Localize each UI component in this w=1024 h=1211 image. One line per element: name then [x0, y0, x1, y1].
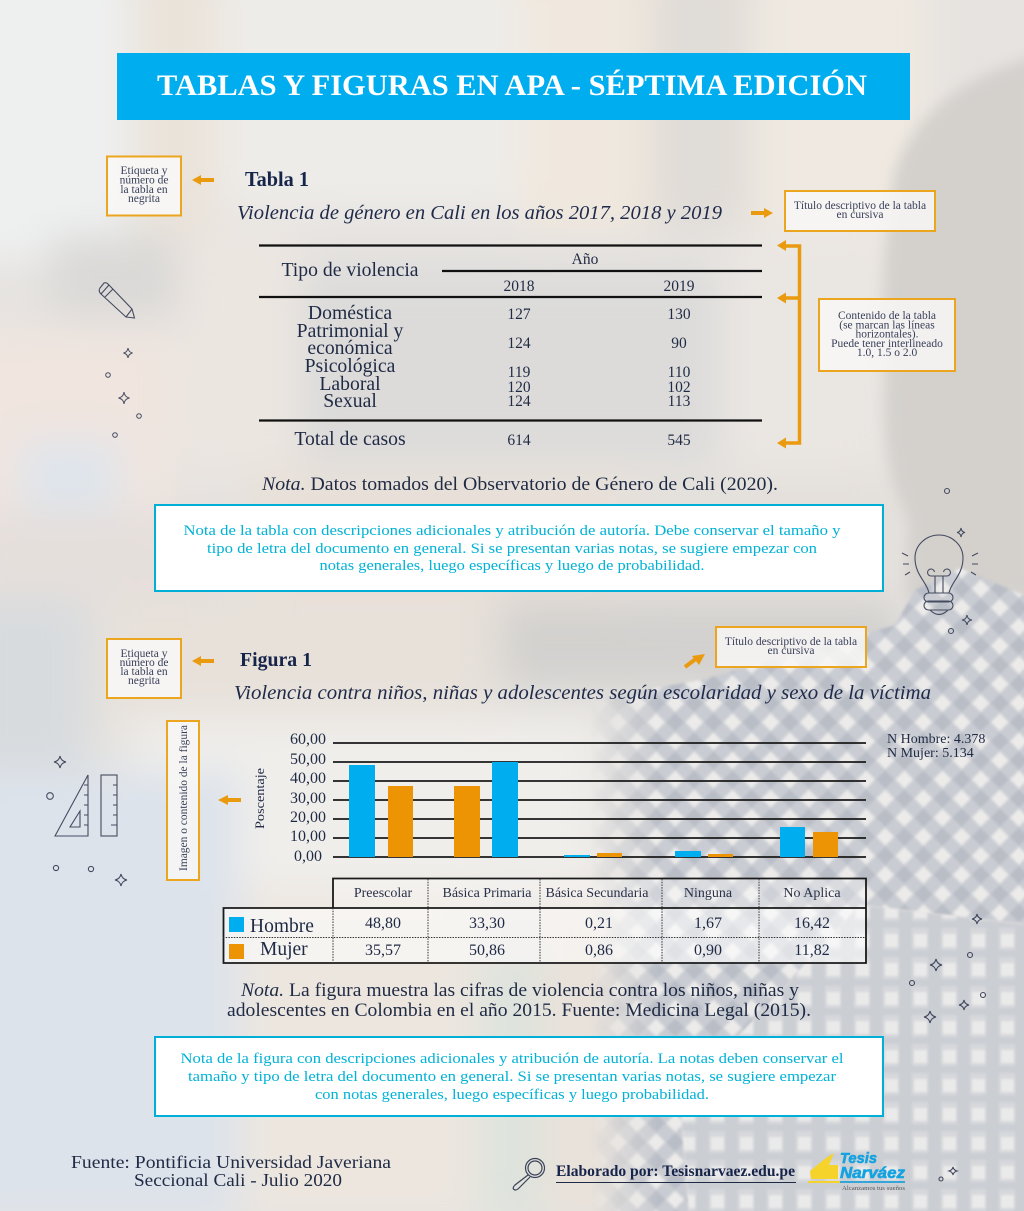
- arrow: titulo figura: [685, 658, 697, 667]
- source footer: Fuente: Pontificia Universidad Javeriana: [71, 1152, 391, 1172]
- table 1: 113: [668, 393, 691, 410]
- callout: etiqueta figura: número de: [120, 657, 168, 669]
- callout: contenido tabla: horizontales).: [856, 328, 919, 340]
- logo: Tesis Narváez: [808, 1150, 905, 1192]
- callout: titulo figura: [716, 627, 866, 667]
- icon: magnifying glass: [513, 1158, 544, 1190]
- table 1: 124: [507, 393, 531, 410]
- bar chart: 20,00: [290, 809, 326, 826]
- callout: contenido tabla: (se marcan las líneas: [839, 320, 935, 332]
- table 1: 102: [667, 379, 691, 396]
- arrow: etiqueta tabla: [192, 175, 214, 185]
- panel: nota de la tabla: notas generales, luego específicas y luego de probabilidad.: [320, 558, 704, 574]
- callout: etiqueta tabla: [107, 156, 181, 216]
- table 1: Laboral: [319, 373, 381, 395]
- figure note: [227, 981, 811, 1021]
- data table: Hombre: [250, 916, 314, 937]
- heading: Tabla 1: Tabla 1: [245, 167, 309, 191]
- table 1: Total de casos: [294, 428, 406, 450]
- table 1: Psicológica: [305, 355, 396, 377]
- bar chart: 40,00: [290, 770, 326, 787]
- bar chart: 0,00: [294, 848, 322, 865]
- data table: 35,57: [365, 942, 401, 959]
- callout: contenido tabla: Contenido de la tabla: [838, 310, 936, 322]
- callout: etiqueta tabla: negrita: [128, 193, 160, 205]
- figure note: Nota. La figura muestra las cifras de violencia contra los niños, niñas y: [240, 981, 800, 1001]
- data table: 16,42: [794, 915, 830, 932]
- data table: 1,67: [694, 915, 722, 932]
- data table: Básica Secundaria: [545, 886, 649, 901]
- table 1: 110: [668, 364, 691, 381]
- table 1: 119: [508, 364, 531, 381]
- table 1: 2018: [504, 278, 535, 295]
- logo: Tesis Narváez: Narváez: [840, 1165, 905, 1182]
- data table: 0,21: [585, 915, 613, 932]
- panel: nota de la tabla: [155, 505, 883, 591]
- table 1: 130: [667, 306, 691, 323]
- y axis title: Poscentaje: [252, 768, 267, 829]
- figure title: Violencia contra niños, niñas y adolescentes según escolaridad y sexo de la víctima: [234, 682, 931, 704]
- data table: [223, 878, 866, 963]
- data table: 33,30: [469, 915, 505, 932]
- logo: Tesis Narváez: Tesis: [840, 1150, 877, 1167]
- bar chart: [290, 731, 866, 865]
- sample size note: N Mujer: 5.134: [887, 746, 974, 761]
- table 1: 545: [667, 432, 691, 449]
- callout: titulo tabla: en cursiva: [837, 209, 883, 221]
- logo: Tesis Narváez: Alcanzamos tus sueños: [842, 1185, 905, 1192]
- panel: nota de la figura: Nota de la figura con descripciones adicionales y atribución de autoría. La notas deben conservar el: [180, 1051, 844, 1067]
- data table: Ninguna: [684, 886, 733, 901]
- panel: nota de la figura: tamaño y tipo de letra del documento en general. Si se presentan varias notas, se sugiere empezar: [188, 1069, 836, 1085]
- callout: etiqueta tabla: la tabla en: [120, 184, 168, 196]
- panel: nota de la tabla: tipo de letra del documento en general. Si se presentan varias notas, se sugiere empezar con: [207, 541, 818, 557]
- callout: imagen o contenido: [167, 721, 199, 880]
- source footer: Seccional Cali - Julio 2020: [134, 1170, 342, 1190]
- table 1: Sexual: [323, 390, 377, 412]
- icon: rulers: [55, 775, 117, 836]
- table 1: 614: [507, 432, 531, 449]
- icon: pencil: [99, 283, 134, 318]
- icon: light bulb: [902, 488, 978, 634]
- callout: contenido tabla: 1.0, 1.5 o 2.0: [857, 347, 917, 359]
- table 1: 90: [671, 335, 687, 352]
- sample size note: N Hombre: 4.378: [887, 732, 985, 747]
- callout: imagen o contenido: Imagen o contenido de la figura: [176, 724, 190, 871]
- panel: nota de la figura: [155, 1037, 883, 1116]
- table 1: 127: [507, 306, 531, 323]
- bar chart: 10,00: [290, 828, 326, 845]
- data table: 0,86: [585, 942, 613, 959]
- data table: 48,80: [365, 915, 401, 932]
- callout: etiqueta figura: [107, 639, 181, 698]
- callout: etiqueta figura: Etiqueta y: [121, 648, 168, 660]
- data table: Mujer: [260, 939, 308, 960]
- icon: pencil sparkles: [106, 348, 141, 437]
- sample size note: [887, 732, 985, 761]
- data table: Preescolar: [354, 886, 412, 901]
- data table: No Aplica: [783, 886, 841, 901]
- table note: Nota. Datos tomados del Observatorio de Género de Cali (2020).: [261, 475, 778, 495]
- figure note: adolescentes en Colombia en el año 2015. Fuente: Medicina Legal (2015).: [227, 1001, 811, 1021]
- data table: 11,82: [794, 942, 830, 959]
- arrow: imagen: [218, 795, 241, 805]
- callout: contenido tabla: [819, 299, 955, 371]
- callout: contenido tabla: Puede tener interlineado: [831, 338, 943, 350]
- callout: titulo figura: Título descriptivo de la tabla: [725, 636, 857, 648]
- callout: titulo tabla: [785, 191, 935, 231]
- table 1: 124: [507, 335, 531, 352]
- callout: etiqueta tabla: Etiqueta y: [121, 165, 168, 177]
- table 1: [259, 246, 762, 450]
- icon: ruler sparkles: [47, 756, 127, 886]
- table 1: 120: [507, 379, 531, 396]
- data table: Básica Primaria: [442, 886, 532, 901]
- data table: 50,86: [469, 942, 505, 959]
- panel: nota de la tabla: Nota de la tabla con descripciones adicionales y atribución de autoría. Debe conservar el tamaño y: [184, 523, 841, 539]
- heading: Figura 1: Figura 1: [240, 649, 312, 671]
- table 1: 2019: [664, 278, 695, 295]
- callout: titulo figura: en cursiva: [768, 645, 814, 657]
- bar chart: 30,00: [290, 790, 326, 807]
- bracket arrows: contenido tabla: [777, 240, 800, 448]
- callout: etiqueta figura: la tabla en: [120, 666, 168, 678]
- credit text: Elaborado por: Tesisnarvaez.edu.pe: [556, 1163, 795, 1180]
- arrow: etiqueta figura: [192, 656, 214, 666]
- table 1: Patrimonial y: [297, 320, 403, 342]
- table 1: Doméstica: [308, 302, 392, 324]
- callout: titulo tabla: Título descriptivo de la tabla: [794, 200, 926, 212]
- callout: etiqueta tabla: número de: [120, 174, 168, 186]
- icon: right sparkles: [910, 914, 986, 1181]
- table 1: Año: [572, 251, 599, 268]
- title banner: [117, 53, 910, 120]
- table 1: económica: [307, 337, 393, 359]
- title banner: TABLAS Y FIGURAS EN APA - SÉPTIMA EDICIÓN: [157, 69, 867, 102]
- source footer: [71, 1152, 391, 1190]
- callout: etiqueta figura: negrita: [128, 675, 160, 687]
- data table: 0,90: [694, 942, 722, 959]
- bar chart: 60,00: [290, 731, 326, 748]
- table 1: Tipo de violencia: [281, 259, 419, 281]
- table title: Violencia de género en Cali en los años 2017, 2018 y 2019: [237, 202, 722, 224]
- arrow: titulo tabla: [751, 208, 773, 218]
- panel: nota de la figura: con notas generales, luego específicas y luego probabilidad.: [315, 1087, 709, 1103]
- bar chart: 50,00: [290, 751, 326, 768]
